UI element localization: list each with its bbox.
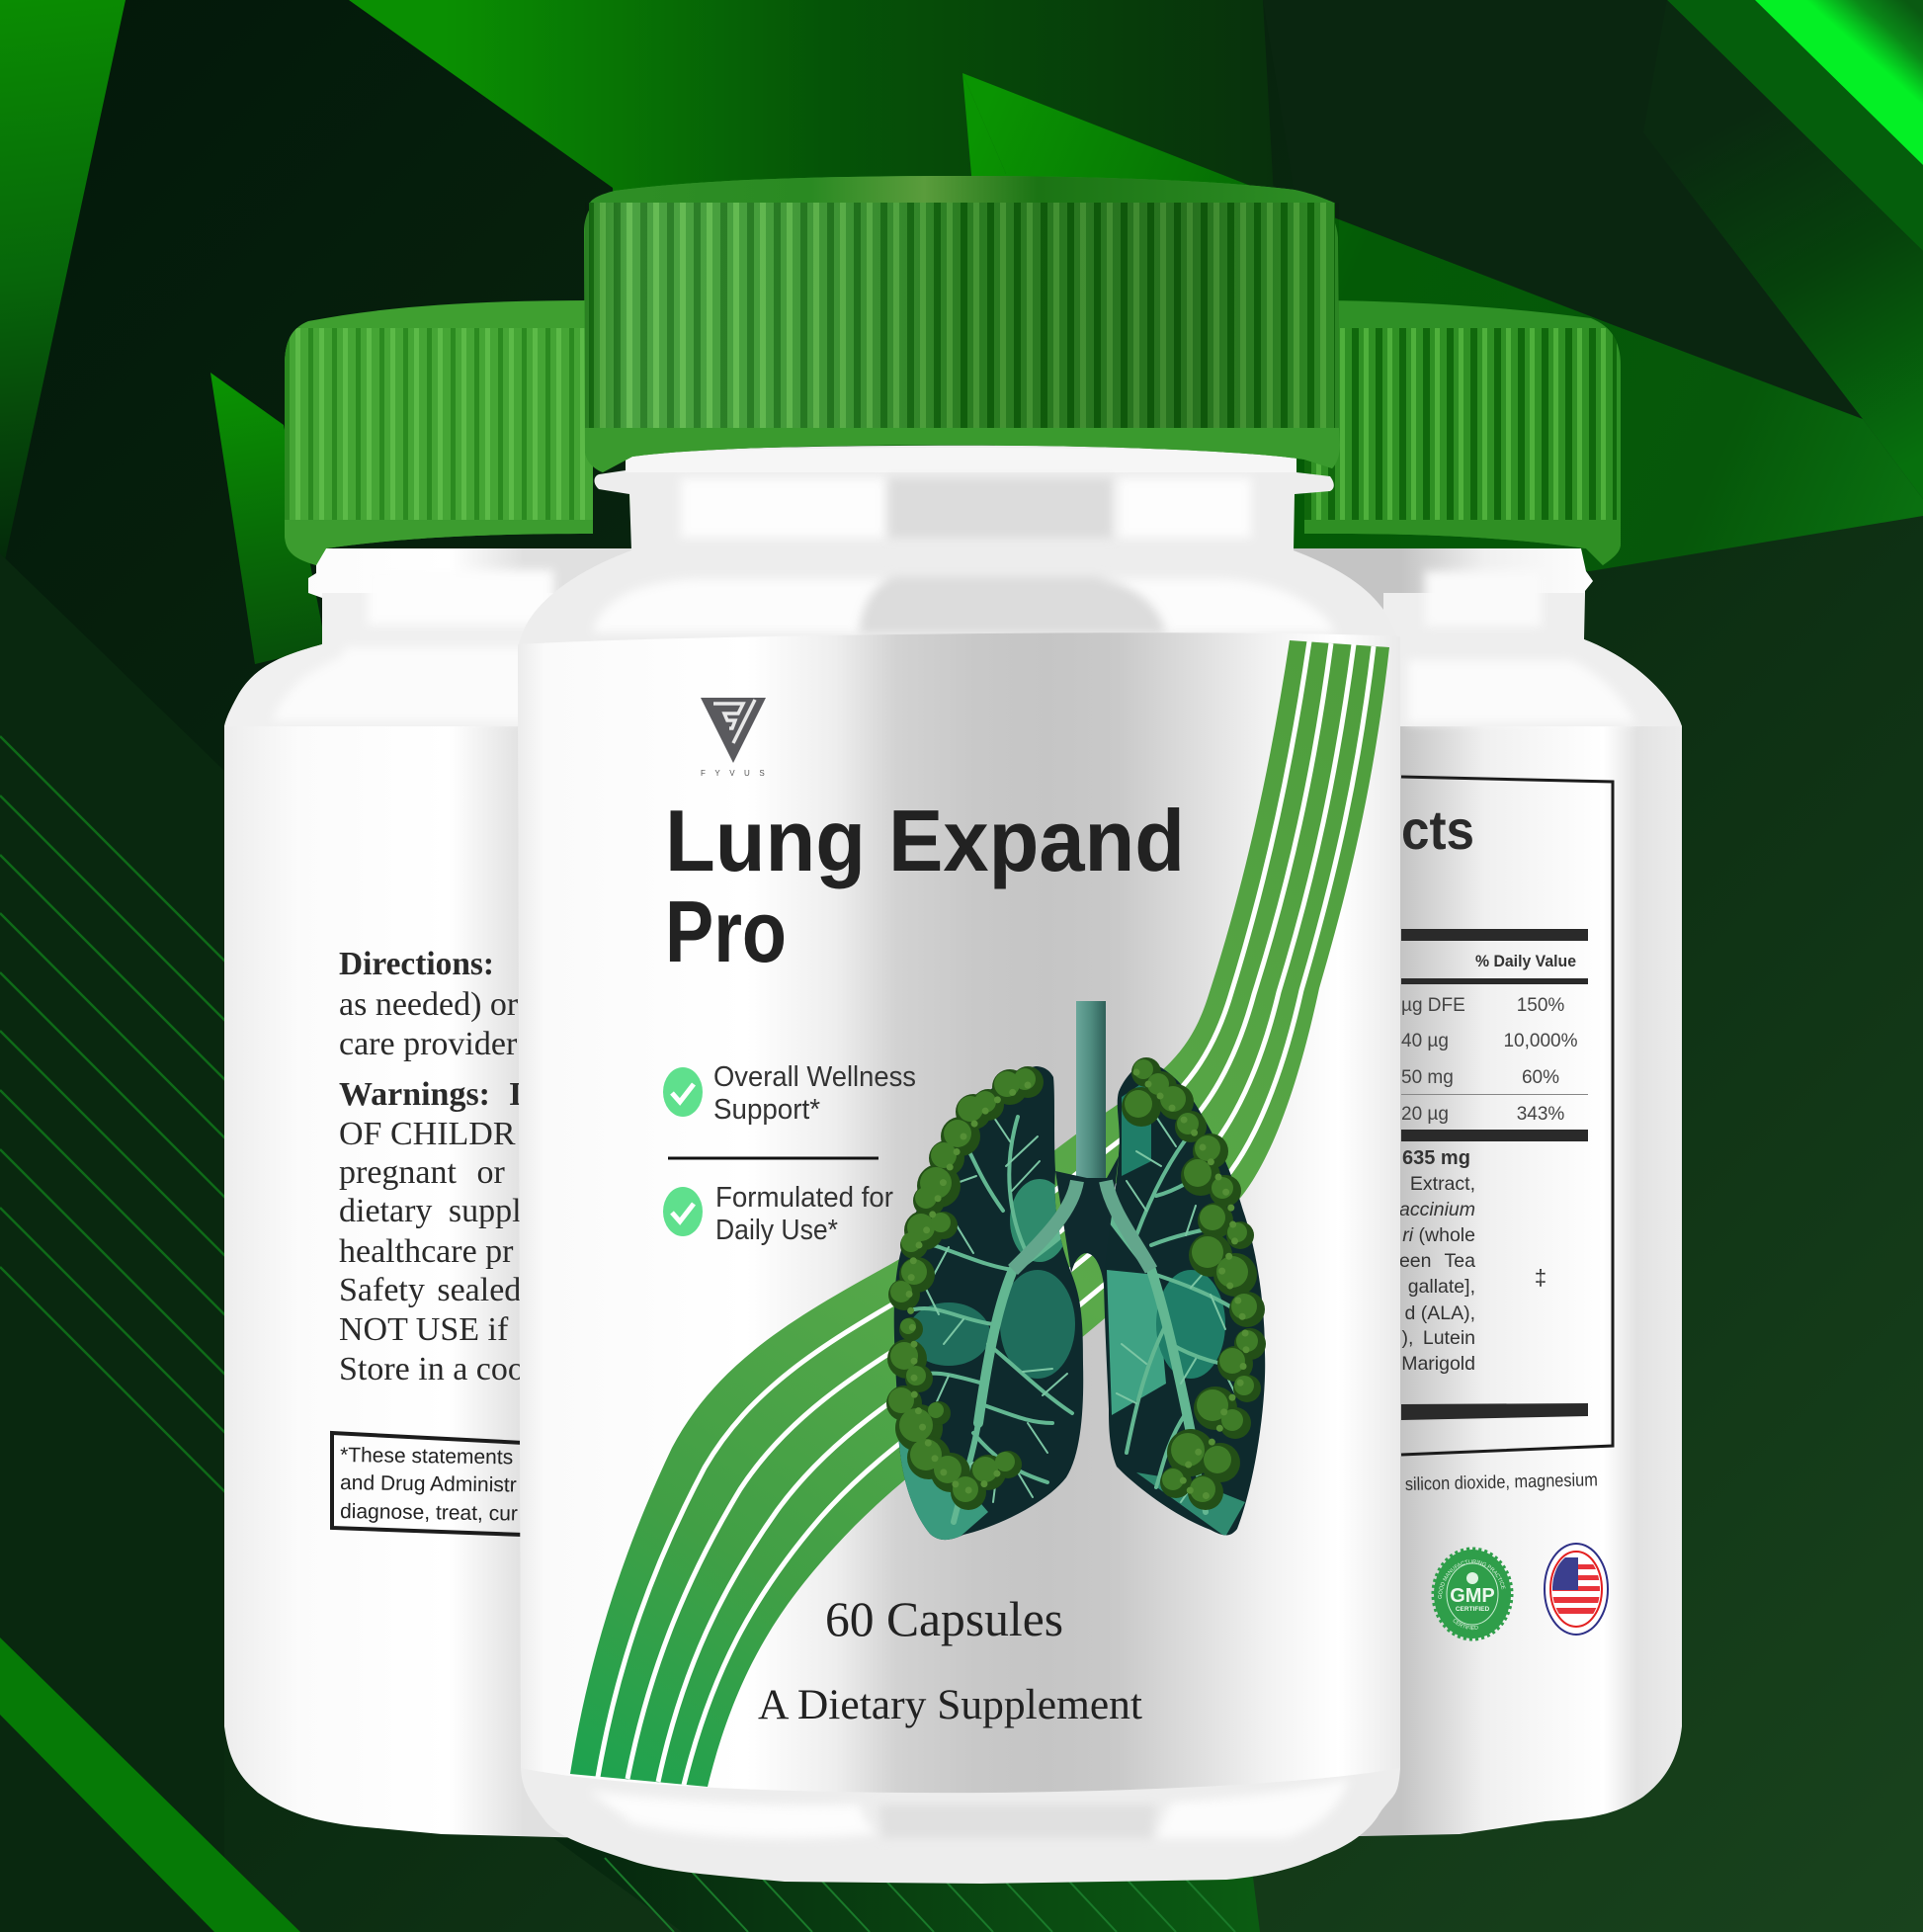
benefit: overall wellness: Overall Wellness [713, 1061, 916, 1093]
front label [518, 632, 1400, 1793]
supplement facts panel: ri (whole [1402, 1224, 1475, 1246]
supplement facts panel: 20 µg [1401, 1104, 1449, 1125]
left bottle directions text: Warnings: [339, 1076, 490, 1113]
left bottle directions text: Store in a coo [339, 1351, 525, 1387]
supplement facts panel: µg DFE [1401, 995, 1465, 1016]
benefit: daily use [663, 1182, 893, 1246]
product title: Lung Expand [665, 792, 1185, 889]
right lung moss [1122, 1057, 1266, 1510]
divider [668, 1156, 878, 1160]
supplement facts panel: gallate], [1408, 1276, 1475, 1298]
icon: GMP certified badge: GMP [1450, 1585, 1495, 1607]
right rear bottle [1294, 300, 1682, 1836]
left bottle directions text: care provider [339, 1026, 518, 1062]
right lung [1104, 1067, 1265, 1536]
brand logo: FYVUS [701, 769, 774, 778]
left bottle disclaimer box: *These statements [340, 1444, 513, 1469]
left bottle disclaimer box: and Drug Administr [340, 1471, 517, 1496]
left rear bottle [224, 296, 632, 1838]
base highlights [589, 1779, 1349, 1838]
brand logo [701, 698, 774, 778]
supplement facts panel: cts [1401, 798, 1474, 861]
supplement facts panel: ), Lutein [1402, 1327, 1475, 1349]
benefit: overall wellness: Support* [713, 1094, 820, 1126]
left lung [893, 1066, 1083, 1540]
product title [665, 792, 1185, 980]
capsule count: 60 Capsules [825, 1591, 1063, 1646]
supplement facts panel [1399, 777, 1613, 1494]
left bottle cap [285, 296, 601, 573]
left bottle directions text: OF CHILDR [339, 1116, 516, 1152]
product title: Pro [665, 882, 787, 980]
left bottle directions text: healthcare pr [339, 1233, 514, 1270]
lung illustration [884, 1001, 1275, 1547]
left bottle directions text [339, 946, 525, 1387]
left bottle directions text: I [509, 1076, 522, 1113]
left bottle shoulder shading [224, 593, 593, 726]
trachea [1076, 1001, 1106, 1189]
supplement facts panel: Marigold [1401, 1353, 1475, 1375]
green swoosh ribbon [570, 640, 1389, 1787]
left bottle directions text: Safety sealed [339, 1272, 521, 1308]
bottle cap [584, 176, 1340, 472]
benefit: overall wellness [663, 1061, 916, 1126]
left bottle body [224, 548, 632, 1838]
right bottle cap [1304, 296, 1625, 573]
left bottle directions text: NOT USE if [339, 1311, 509, 1348]
icon: GMP certified badge: GOOD MANUFACTURING PRACTICE [1438, 1559, 1506, 1599]
supplement facts panel: d (ALA), [1404, 1302, 1475, 1324]
icon: GMP certified badge [1431, 1548, 1514, 1640]
supplement facts panel: 343% [1517, 1104, 1564, 1125]
icon: GMP certified badge: CERTIFIED [1453, 1619, 1478, 1631]
supplement facts panel: accinium [1399, 1199, 1475, 1220]
left bottle directions text: Directions: [339, 946, 494, 982]
left bottle disclaimer box: diagnose, treat, cur [340, 1500, 518, 1526]
benefit: daily use: Daily Use* [715, 1215, 838, 1246]
icon: GMP certified badge: CERTIFIED [1456, 1606, 1489, 1613]
supplement facts panel: 40 µg [1401, 1031, 1449, 1051]
right bottle shoulder shading [1383, 593, 1682, 726]
supplement facts panel: ‡ [1535, 1265, 1547, 1290]
benefit: daily use: Formulated for [715, 1182, 893, 1214]
left bottle disclaimer box [332, 1433, 524, 1535]
icon: USA flag badge [1545, 1544, 1608, 1635]
bottle body [518, 446, 1400, 1884]
centre bottle [518, 176, 1400, 1884]
supplement facts panel: 10,000% [1503, 1031, 1578, 1051]
supplement facts panel: % Daily Value [1475, 953, 1576, 970]
supplement facts panel: 635 mg [1402, 1147, 1470, 1169]
neck highlights [626, 448, 1296, 538]
central dark bridge [1055, 1156, 1119, 1285]
left bottle directions text: dietary suppl [339, 1193, 522, 1229]
supplement facts panel: 60% [1522, 1067, 1559, 1088]
supplement facts panel: 150% [1517, 995, 1564, 1016]
right bottle body [1285, 548, 1682, 1836]
supplement facts panel: een Tea [1399, 1250, 1475, 1272]
supplement facts panel: silicon dioxide, magnesium [1405, 1469, 1598, 1494]
shoulder highlights [593, 577, 1336, 632]
left lung moss [886, 1066, 1044, 1510]
supplement facts panel: Extract, [1410, 1173, 1475, 1195]
left bottle directions text: as needed) or [339, 986, 519, 1023]
left bottle directions text: pregnant or [339, 1154, 505, 1191]
supplement facts panel: 50 mg [1401, 1067, 1454, 1088]
product type: A Dietary Supplement [758, 1682, 1142, 1728]
bronchi [1013, 1181, 1151, 1270]
